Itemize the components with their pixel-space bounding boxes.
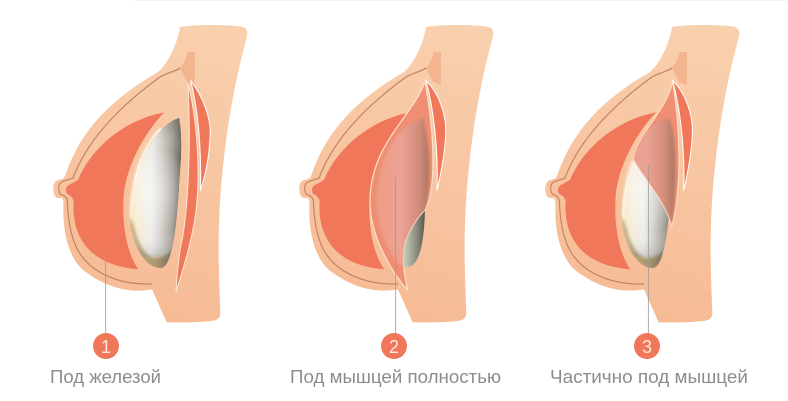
panel 3: implant partly under the muscle [545,25,739,334]
shaded fold [180,52,195,85]
pectoralis minor [673,81,692,191]
torso silhouette [545,25,739,322]
shaded fold [426,52,441,85]
torso silhouette [53,25,247,322]
implant [128,118,182,268]
leader line 1 [104,245,107,334]
top edge hairline [135,0,788,1]
leader line 3 [647,165,650,334]
mammary gland [558,112,656,269]
label 1: Под железой [50,367,161,387]
badge 1 [93,333,119,359]
label 2: Под мышцей полностью [290,367,501,387]
mammary gland [66,112,164,269]
pectoralis major [176,84,198,292]
badge 2: 2 [389,337,399,357]
panel 2: implant fully under the muscle [299,25,493,334]
panel 1: implant under the gland [53,25,247,334]
shaded fold [672,52,687,85]
muscle over upper implant [632,82,679,227]
leader line 2 [394,177,397,334]
pectoralis minor [426,81,446,191]
pectoralis minor [191,81,210,191]
implant [622,159,668,268]
skin line [305,68,426,284]
badge 3: 3 [642,337,652,357]
label 3: Частично под мышцей [550,367,748,387]
exposed lower implant [404,209,425,268]
torso silhouette [299,25,493,322]
mammary gland [312,112,410,269]
badge 1: 1 [101,337,111,357]
badge 2 [381,333,407,359]
skin line [551,68,672,284]
muscle over implant [370,82,433,291]
badge 3 [634,333,660,359]
skin line [59,68,180,284]
